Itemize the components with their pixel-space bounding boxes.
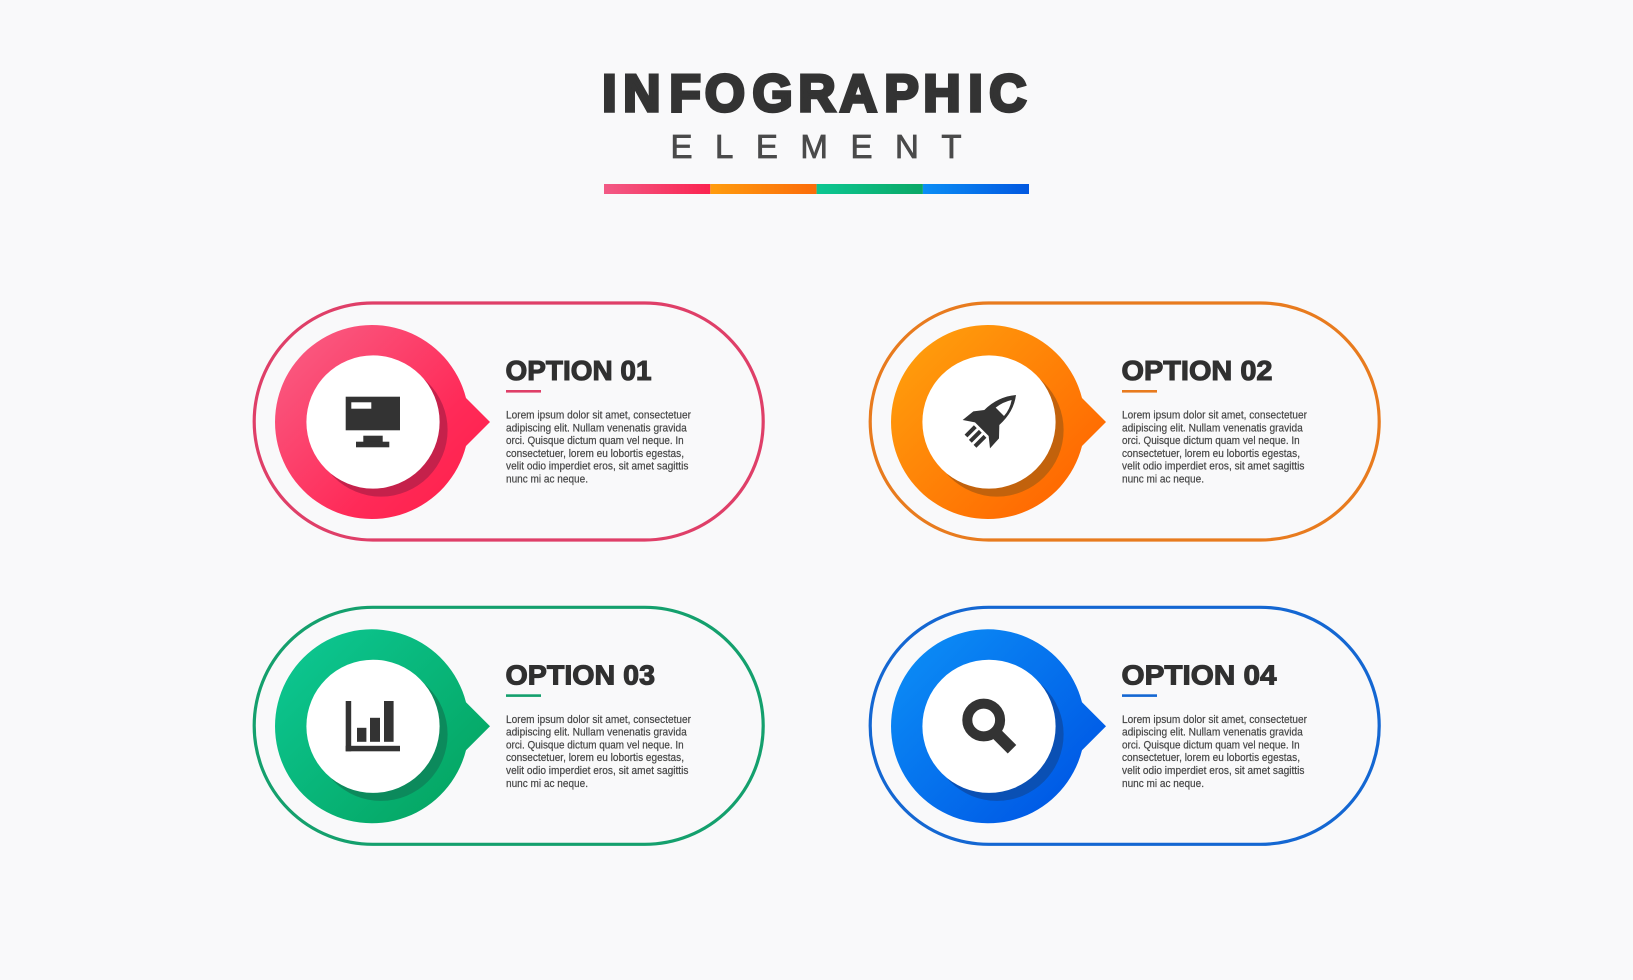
body text: velit odio imperdiet eros, sit amet sagittis bbox=[1122, 765, 1304, 777]
body text: Lorem ipsum dolor sit amet, consectetuer bbox=[1122, 714, 1307, 726]
body text: orci. Quisque dictum quam vel neque. In bbox=[1122, 435, 1300, 447]
body text: adipiscing elit. Nullam venenatis gravida bbox=[506, 422, 687, 434]
body text: Lorem ipsum dolor sit amet, consectetuer bbox=[506, 410, 691, 422]
underline bbox=[1122, 694, 1157, 697]
underline bbox=[506, 390, 541, 393]
body text: consectetuer, lorem eu lobortis egestas, bbox=[1122, 752, 1300, 764]
body text: nunc mi ac neque. bbox=[506, 778, 588, 790]
body text: nunc mi ac neque. bbox=[1122, 474, 1204, 486]
white disc bbox=[306, 660, 440, 793]
badge inner shadow bbox=[314, 363, 448, 497]
body text: orci. Quisque dictum quam vel neque. In bbox=[506, 739, 684, 751]
body text: adipiscing elit. Nullam venenatis gravida bbox=[506, 727, 687, 739]
body text: adipiscing elit. Nullam venenatis gravida bbox=[1122, 727, 1303, 739]
pill outline bbox=[870, 607, 1379, 844]
white disc bbox=[922, 355, 1056, 489]
body text: Lorem ipsum dolor sit amet, consectetuer bbox=[1122, 410, 1307, 422]
body text: velit odio imperdiet eros, sit amet sagittis bbox=[506, 765, 688, 777]
pill outline bbox=[254, 303, 763, 540]
heading: OPTION 03 bbox=[506, 659, 655, 690]
white disc bbox=[922, 660, 1056, 793]
title: INFOGRAPHIC bbox=[602, 64, 1026, 122]
underline bbox=[506, 694, 541, 697]
badge with pointer bbox=[275, 629, 490, 823]
badge with pointer bbox=[891, 629, 1106, 823]
heading: OPTION 01 bbox=[506, 355, 652, 386]
body text bbox=[506, 714, 691, 790]
underline bbox=[1122, 390, 1157, 393]
badge inner shadow bbox=[930, 668, 1064, 801]
body text: orci. Quisque dictum quam vel neque. In bbox=[1122, 739, 1300, 751]
body text bbox=[506, 410, 691, 486]
body text: nunc mi ac neque. bbox=[1122, 778, 1204, 790]
panel: option 01 bbox=[254, 303, 763, 540]
heading: OPTION 02 bbox=[1122, 355, 1272, 386]
body text bbox=[1122, 714, 1307, 790]
badge inner shadow bbox=[314, 668, 448, 801]
body text: velit odio imperdiet eros, sit amet sagittis bbox=[1122, 461, 1304, 473]
colour bar bbox=[604, 184, 1029, 194]
body text: Lorem ipsum dolor sit amet, consectetuer bbox=[506, 714, 691, 726]
body text: velit odio imperdiet eros, sit amet sagittis bbox=[506, 461, 688, 473]
pill outline bbox=[870, 303, 1379, 540]
icon: bar chart bbox=[346, 701, 400, 751]
icon: monitor bbox=[346, 397, 400, 447]
white disc bbox=[306, 355, 440, 489]
body text: consectetuer, lorem eu lobortis egestas, bbox=[506, 752, 684, 764]
badge with pointer bbox=[891, 325, 1106, 519]
icon: rocket bbox=[963, 395, 1016, 448]
panel: option 02 bbox=[870, 303, 1379, 540]
icon: magnifier bbox=[967, 704, 1012, 749]
badge inner shadow bbox=[930, 363, 1064, 497]
body text: consectetuer, lorem eu lobortis egestas, bbox=[1122, 448, 1300, 460]
panel: option 04 bbox=[870, 607, 1379, 844]
badge with pointer bbox=[275, 325, 490, 519]
panel: option 03 bbox=[254, 607, 763, 844]
heading: OPTION 04 bbox=[1122, 659, 1277, 690]
body text: adipiscing elit. Nullam venenatis gravida bbox=[1122, 422, 1303, 434]
body text bbox=[1122, 410, 1307, 486]
subtitle: ELEMENT bbox=[670, 128, 962, 165]
pill outline bbox=[254, 607, 763, 844]
body text: orci. Quisque dictum quam vel neque. In bbox=[506, 435, 684, 447]
body text: nunc mi ac neque. bbox=[506, 474, 588, 486]
body text: consectetuer, lorem eu lobortis egestas, bbox=[506, 448, 684, 460]
